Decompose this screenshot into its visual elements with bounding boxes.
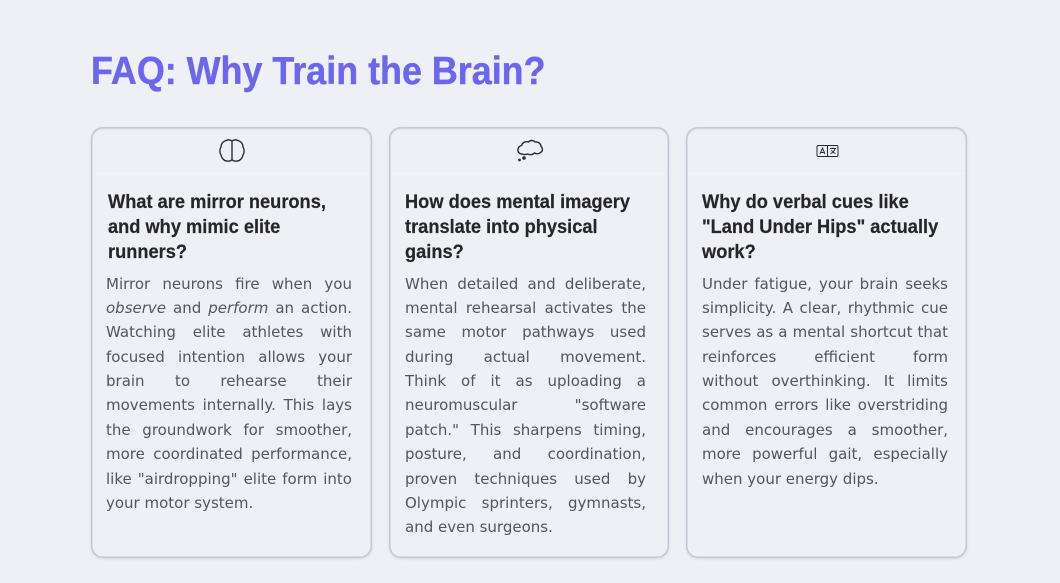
answer text: focused intention allows your — [106, 348, 352, 366]
answer text: posture, and coordination, — [405, 445, 646, 463]
answer text: and encourages a smoother, — [702, 421, 948, 439]
answer text: Watching elite athletes with — [106, 323, 352, 341]
question heading — [108, 192, 326, 263]
icon: translate — [688, 129, 965, 174]
title: FAQ: Why Train the Brain? — [91, 50, 546, 93]
question heading: What are mirror neurons, — [108, 192, 326, 213]
answer text: Think of it as uploading a — [405, 372, 646, 390]
icon: brain — [93, 129, 370, 174]
question heading: "Land Under Hips" actually — [702, 217, 938, 238]
answer text: Under fatigue, your brain seeks — [702, 274, 948, 292]
answer text: your motor system. — [106, 494, 253, 512]
question heading: gains? — [405, 242, 464, 263]
question heading: Why do verbal cues like — [702, 192, 909, 213]
question heading — [405, 192, 630, 263]
question heading — [702, 192, 938, 263]
answer text: same motor pathways used — [405, 323, 646, 341]
question heading: and why mimic elite — [108, 217, 280, 238]
answer text: patch." This sharpens timing, — [405, 421, 646, 439]
answer text: like "airdropping" elite form into — [106, 470, 352, 488]
icon: thought bubble — [391, 129, 667, 174]
panel: mirror neurons — [91, 127, 372, 558]
answer text: When detailed and deliberate, — [405, 274, 646, 292]
answer text: more powerful gait, especially — [702, 445, 948, 463]
answer text: during actual movement. — [405, 348, 646, 366]
answer text: reinforces efficient form — [702, 348, 948, 366]
answer text: when your energy dips. — [702, 470, 879, 488]
answer text — [106, 274, 352, 512]
answer text: brain to rehearse their — [106, 372, 352, 390]
answer text — [702, 274, 948, 488]
answer text: common errors like overstriding — [702, 396, 948, 414]
answer text: proven techniques used by — [405, 470, 646, 488]
answer text: mental rehearsal activates the — [405, 299, 646, 317]
answer text: the groundwork for smoother, — [106, 421, 352, 439]
panel: mental imagery — [389, 127, 669, 558]
question heading: translate into physical — [405, 217, 598, 238]
answer text — [404, 274, 646, 536]
answer text: movements internally. This lays — [106, 396, 352, 414]
answer text: and even surgeons. — [405, 518, 553, 536]
panel: verbal cues — [686, 127, 967, 558]
answer text: Mirror neurons fire when you — [106, 274, 352, 292]
answer text: neuromuscular "software — [405, 396, 646, 414]
answer text: without overthinking. It limits — [702, 372, 948, 390]
answer text: serves as a mental shortcut that — [702, 323, 948, 341]
answer text: simplicity. A clear, rhythmic cue — [702, 299, 948, 317]
question heading: How does mental imagery — [405, 192, 630, 213]
question heading: runners? — [108, 242, 187, 263]
answer text: Olympic sprinters, gymnasts, — [405, 494, 646, 512]
question heading: work? — [702, 242, 756, 263]
answer text: observe and perform an action. — [106, 299, 352, 317]
answer text: more coordinated performance, — [106, 445, 352, 463]
